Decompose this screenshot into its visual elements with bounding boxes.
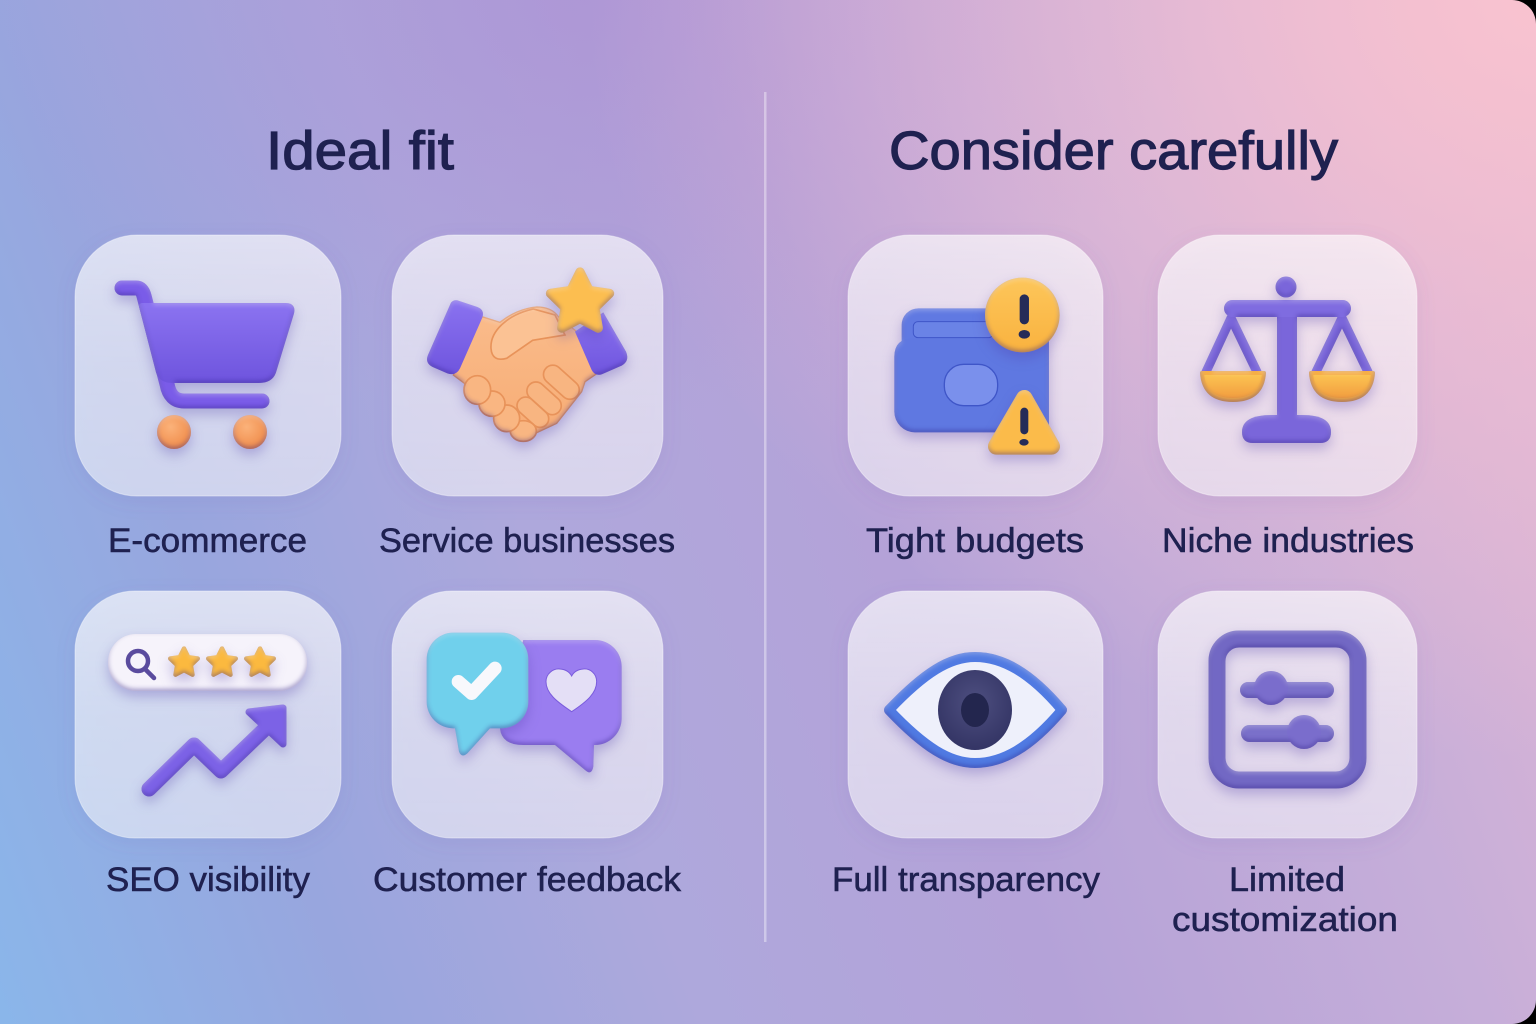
- tile: [75, 591, 341, 838]
- icon: warning triangle: [996, 398, 1052, 446]
- icon: shopping cart: [122, 288, 291, 449]
- icon: sliders panel: [1217, 639, 1358, 780]
- label: Niche industries: [1162, 522, 1414, 560]
- icon: purple speech bubble: [500, 640, 622, 772]
- label: [1172, 861, 1398, 939]
- card: Limited customization: [1158, 591, 1417, 939]
- icon: blue speech bubble: [427, 633, 528, 755]
- label: Tight budgets: [866, 522, 1084, 560]
- icon: eye: [889, 657, 1062, 763]
- label: customization: [1172, 901, 1398, 939]
- icon: wallet: [894, 308, 1049, 432]
- card: Full transparency: [832, 591, 1103, 899]
- icon: warning circle: [985, 278, 1060, 352]
- label: E-commerce: [108, 522, 307, 560]
- card: E-commerce: [75, 235, 341, 560]
- tile: [75, 235, 341, 496]
- card: Niche industries: [1158, 235, 1417, 560]
- icon: balance scale: [1202, 276, 1373, 443]
- tile: [848, 235, 1103, 496]
- card: Tight budgets: [848, 235, 1103, 560]
- heading: Consider carefully: Consider carefully: [889, 121, 1338, 181]
- label: Full transparency: [832, 861, 1100, 899]
- card: Service businesses: [379, 235, 675, 560]
- card: Customer feedback: [373, 591, 682, 899]
- label: Limited: [1229, 861, 1345, 899]
- label: SEO visibility: [106, 861, 310, 899]
- icon: handshake: [427, 300, 627, 441]
- tile: [392, 235, 663, 496]
- divider: [764, 92, 766, 942]
- card: SEO visibility: [75, 591, 341, 899]
- icon: star: [551, 272, 609, 328]
- tile: [848, 591, 1103, 838]
- tile: [392, 591, 663, 838]
- heading: Ideal fit: Ideal fit: [266, 121, 454, 181]
- icon: search rating bar: [108, 634, 307, 691]
- label: Service businesses: [379, 522, 675, 560]
- label: Customer feedback: [373, 861, 682, 899]
- icon: growth arrow: [149, 708, 283, 789]
- tile: [1158, 591, 1417, 838]
- tile: [1158, 235, 1417, 496]
